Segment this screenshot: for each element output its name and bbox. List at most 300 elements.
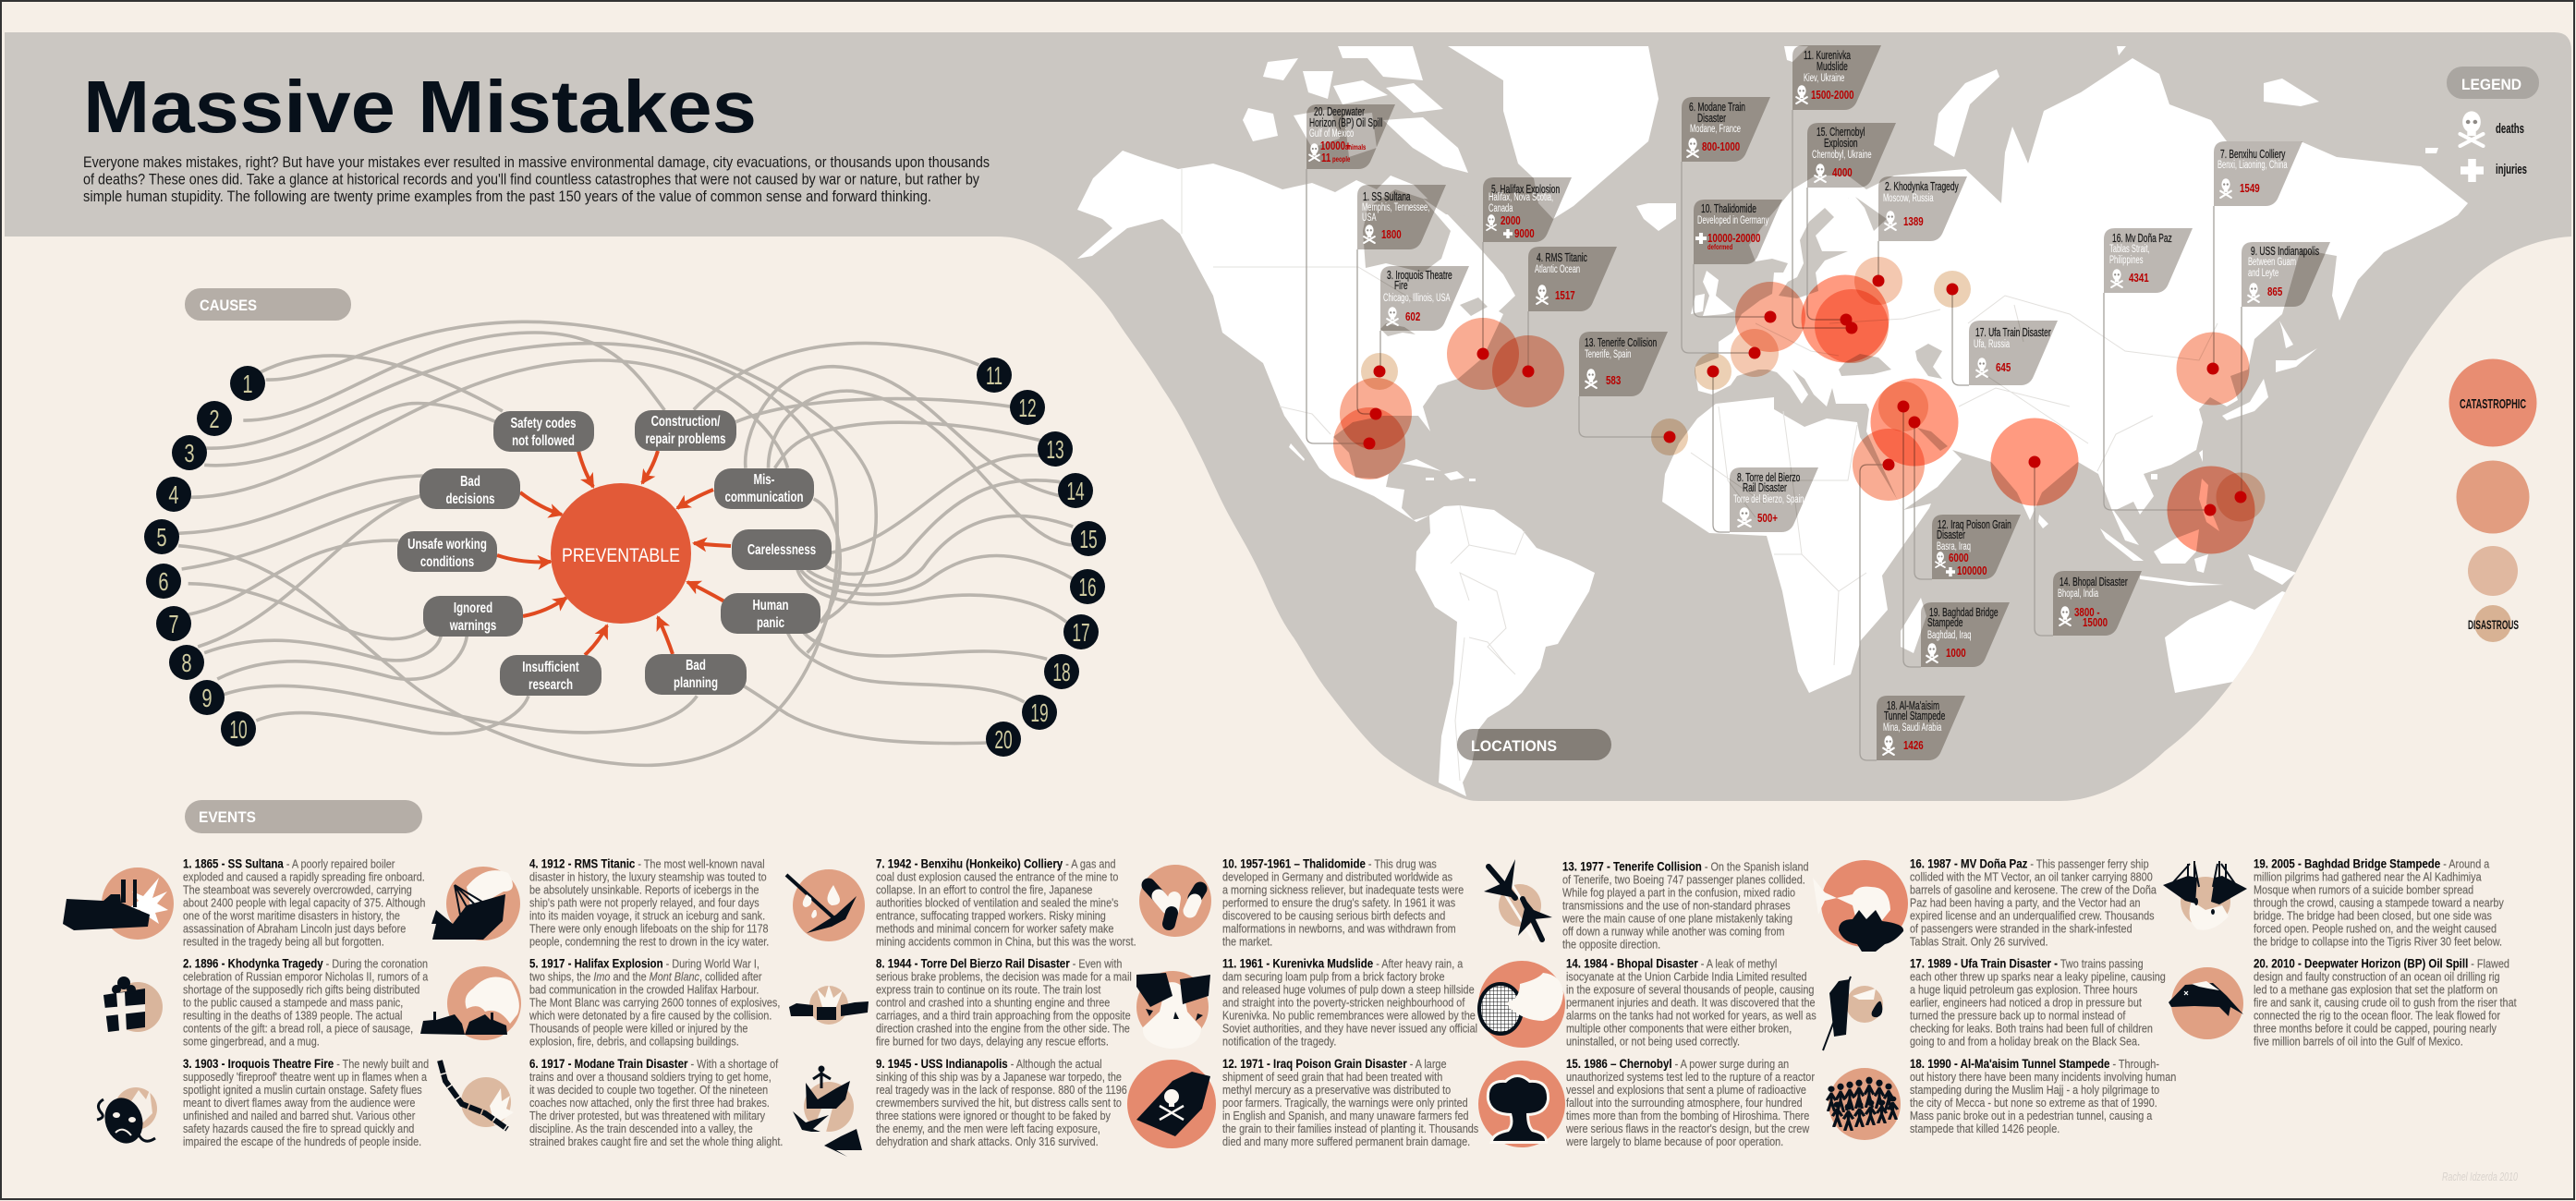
- severity legend: [2448, 358, 2537, 642]
- location label: 4 RMS Titanic: Atlantic Ocean: [1535, 263, 1580, 276]
- location label: 2 Khodynka Tragedy: [1878, 176, 1967, 241]
- intro text block: Everyone makes mistakes, right? But have your mistakes ever resulted in massive environmental damage, city evacuations, or thousands upon thousands: [83, 153, 990, 171]
- numbered event nodes left: 2: [209, 406, 220, 434]
- event 1 text: assassination of Abraham Lincoln just days before: [183, 922, 407, 936]
- location label: 3 Iroquois Theatre Fire: [1380, 266, 1469, 331]
- cause pills: planning: [674, 673, 718, 690]
- event 19 text: [2254, 855, 2504, 949]
- event 6 text: [529, 1056, 783, 1148]
- icon: 14 leaking tank: [1478, 961, 1565, 1048]
- numbered event nodes right: 19: [1030, 698, 1049, 727]
- event 16 text: - This passenger ferry ship: [2030, 857, 2149, 871]
- event 15 text: [1565, 1056, 1815, 1148]
- event 5 text: Thousands of people were killed or injured by the: [529, 1022, 748, 1036]
- event 2 text: 2. 1896 - Khodynka Tragedy: [183, 955, 323, 971]
- numbered event nodes right: 13: [1046, 435, 1064, 464]
- event 4 text: people, condemning the rest to drown in the icy water.: [529, 935, 769, 949]
- location label: 5 Halifax Explosion: [1483, 177, 1572, 242]
- location label: 9 USS Indianapolis: Between Guam: [2248, 256, 2296, 269]
- cause pills: Ignored: [454, 599, 492, 615]
- numbered event nodes right: 18: [1052, 658, 1071, 686]
- legend: injuries: [2461, 159, 2527, 182]
- event 5 text: [529, 955, 780, 1049]
- location label: 18 Al-Ma'aisim: Tunnel Stampede: [1884, 710, 1945, 723]
- event 3 text: safety hazards caused the fire to spread quickly and: [183, 1122, 414, 1135]
- event 1 text: exploded and caused a rapidly spreading fire onboard.: [183, 870, 425, 884]
- icon: 7 pickaxe: [786, 869, 865, 941]
- location label: 7 Benxihu Colliery: 1549: [2240, 183, 2260, 195]
- numbered event nodes left: 4: [168, 481, 179, 510]
- event 6 text: 6. 1917 - Modane Train Disaster: [529, 1056, 688, 1071]
- location label: 16 Mv Dona Paz: 16. Mv Doña Paz: [2112, 232, 2172, 246]
- event 14 text: 14. 1984 - Bhopal Disaster: [1566, 955, 1698, 971]
- event 13 text: transmissions and the use of non-standard phrases: [1562, 899, 1791, 913]
- event 20 text: [2254, 955, 2517, 1049]
- location label: 2 Khodynka Tragedy: Moscow, Russia: [1883, 192, 1934, 205]
- icon: 8 train collision: [789, 985, 869, 1025]
- heading: events: [185, 800, 422, 833]
- event 4 text: - The most well-known naval: [638, 857, 765, 871]
- cause pills: Construction/: [651, 412, 721, 429]
- location label: 8 Torre del Bierzo: Rail Disaster: [1743, 481, 1787, 495]
- location label: 13 Tenerife Collision: 583: [1606, 375, 1621, 387]
- intro text block: of deaths? These ones did. Take a glance at historical records and you'll find countless catastrophes that were not caused by war or nature, but rather by: [83, 170, 979, 188]
- event 15 text: 15. 1986 – Chernobyl: [1566, 1056, 1672, 1071]
- location label: 17 Ufa Train Disaster: 17. Ufa Train Disaster: [1975, 326, 2051, 340]
- severity legend: CATASTROPHIC: [2460, 396, 2526, 412]
- legend heading: [2447, 67, 2539, 99]
- location label: 11 Kurenivka Mudslide: Kiev, Ukraine: [1804, 72, 1845, 85]
- location label: 6 Modane Train Disaster: [1682, 97, 1770, 162]
- cause pills: research: [529, 675, 573, 692]
- event 8 text: [876, 955, 1132, 1049]
- location label: 15 Chernobyl Explosion: 15. Chernobyl: [1817, 126, 1865, 140]
- location label: 9 USS Indianapolis: 9. USS Indianapolis: [2251, 245, 2320, 259]
- event 13 text: While fog played a part in the confusion, mixed radio: [1562, 886, 1795, 900]
- event 9 text: real tragedy was in the lack of response. 880 of the 1196: [876, 1083, 1127, 1097]
- event 3 text: supposedly 'fireproof' theatre went up in flames when a: [183, 1070, 427, 1084]
- icon: 15 mushroom cloud: [1478, 1061, 1565, 1147]
- event 12 text: - A large: [1410, 1057, 1447, 1071]
- event 17 text: 17. 1989 - Ufa Train Disaster -: [1910, 955, 2058, 971]
- location label: 20 Deepwater Horizon: [1306, 104, 1395, 169]
- location label: 15 Chernobyl Explosion: Chernobyl, Ukraine: [1812, 149, 1872, 162]
- event 14 text: multiple other components that were either broken,: [1566, 1022, 1792, 1036]
- event 17 text: going to and from a holiday break on the Black Sea.: [1910, 1035, 2140, 1049]
- numbered event nodes right: 14: [1066, 477, 1085, 505]
- location label: 19 Baghdad Bridge Stampede: [1921, 602, 2010, 667]
- location label: 14 Bhopal Disaster: 15000: [2083, 617, 2108, 629]
- cause pills: Safety codes: [510, 414, 577, 431]
- location label: 12 Iraq Poison Grain: 6000: [1949, 552, 1969, 564]
- event 2 text: to the public caused a stampede and mass panic,: [183, 996, 403, 1010]
- event 14 text: permanent injuries and death. It was discovered that the: [1566, 996, 1816, 1010]
- icon: 10 pills: [1139, 865, 1211, 937]
- event 15 text: were serious flaws in the reactor's design, but the crew: [1565, 1122, 1809, 1135]
- event 17 text: checking for leaks. Both trains had been full of children: [1910, 1022, 2153, 1036]
- event 15 text: were largely to blame because of poor operation.: [1565, 1134, 1783, 1148]
- event 2 text: - During the coronation: [326, 957, 428, 971]
- event 8 text: 8. 1944 - Torre Del Bierzo Rail Disaster: [876, 955, 1070, 971]
- location label: 5 Halifax Explosion: 2000: [1501, 215, 1521, 227]
- event 20 text: connected the rig to the ocean floor. The leak flowed for: [2254, 1009, 2500, 1023]
- event 4 text: [529, 855, 769, 949]
- location label: 20 Deepwater Horizon: Gulf of Mexico: [1309, 127, 1355, 140]
- event 17 text: [1910, 955, 2166, 1049]
- severity circles on map: [1333, 257, 2266, 554]
- location label: 20 Deepwater Horizon: people: [1332, 156, 1350, 164]
- event 10 text: developed in Germany and distributed worldwide as: [1222, 870, 1452, 884]
- event 19 text: Mosque when rumors of a suicide bomber spread: [2254, 883, 2473, 897]
- event 18 text: Mass panic broke out in a pedestrian tunnel, causing a: [1910, 1109, 2153, 1122]
- event 20 text: led to a methane gas explosion that set the platform on: [2254, 983, 2497, 997]
- event 12 text: [1222, 1056, 1478, 1148]
- event 9 text: crewmembers survived the hit, but distress calls sent to: [876, 1096, 1122, 1110]
- cause pills: repair problems: [645, 430, 726, 446]
- location label: 18 Al-Ma'aisim: 1426: [1903, 740, 1924, 752]
- event 16 text: expired license and an underqualified crew. Thousands: [1910, 909, 2155, 923]
- event 17 text: each other threw up sparks near a leaky pipeline, causing: [1910, 970, 2166, 984]
- event 12 text: died and many more suffered permanent brain damage.: [1222, 1134, 1470, 1148]
- event 9 text: [876, 1056, 1127, 1148]
- cause pills: Carelessness: [747, 540, 816, 557]
- event 5 text: 5. 1917 - Halifax Explosion: [529, 955, 663, 971]
- event 13 text: off down a runway while another was coming from: [1562, 925, 1784, 939]
- event 8 text: carriages, and a third train approaching from the opposite: [876, 1009, 1131, 1023]
- icon: 9 sinking ship with sharks: [793, 1066, 862, 1157]
- cause pills: not followed: [512, 431, 575, 448]
- icon: 3 theatre mask: [97, 1087, 157, 1148]
- event 1 text: - A poorly repaired boiler: [286, 857, 395, 871]
- event 4 text: be absolutely unsinkable. Reports of icebergs in the: [529, 883, 759, 897]
- location label: 17 Ufa Train Disaster: Ufa, Russia: [1974, 338, 2010, 351]
- cause pills: [397, 410, 832, 696]
- event 20 text: 20. 2010 - Deepwater Horizon (BP) Oil Spill: [2254, 955, 2468, 971]
- event 19 text: forced open. People rushed on, and the weight caused: [2254, 922, 2497, 936]
- event 9 text: sinking of this ship was by a Japanese war torpedo, the: [876, 1070, 1122, 1084]
- event 18 text: the city of Mecca - but none so extreme as that of 1990.: [1910, 1096, 2157, 1110]
- location label: 1 SS Sultana: USA: [1362, 212, 1377, 224]
- location label: 6 Modane Train Disaster: 800-1000: [1702, 141, 1740, 153]
- event 10 text: malformations in newborns, and was withdrawn from: [1222, 922, 1456, 936]
- event 17 text: Two trains passing: [2060, 957, 2144, 971]
- location label: 19 Baghdad Bridge Stampede: 1000: [1946, 648, 1966, 660]
- location label: 1 SS Sultana: 1800: [1381, 229, 1402, 241]
- location label: 16 Mv Dona Paz: 4341: [2129, 273, 2149, 285]
- event 11 text: notification of the tragedy.: [1222, 1035, 1336, 1049]
- numbered event nodes left: 8: [181, 649, 192, 678]
- icon: 13 colliding planes: [1484, 859, 1552, 940]
- location label: 10 Thalidomide: Developed in Germany: [1697, 214, 1768, 227]
- event 16 text: barrels of gasoline and kerosene. The crew of the Doña: [1910, 883, 2157, 897]
- numbered event nodes left: 10: [229, 715, 248, 744]
- location label: 11 Kurenivka Mudslide: 1500-2000: [1811, 90, 1854, 102]
- intro text block: simple human stupidity. The following are twenty prime examples from the past 150 years of the value of common sense and forward thinking.: [83, 188, 931, 205]
- location label: 13 Tenerife Collision: [1579, 332, 1668, 396]
- event 13 text: - On the Spanish island: [1705, 860, 1809, 874]
- event 2 text: some gingerbread, and a mug.: [183, 1035, 320, 1049]
- heading: causes: [185, 288, 351, 321]
- location label: 7 Benxihu Colliery: Benxi, Liaoning, China: [2218, 159, 2288, 172]
- location label: 5 Halifax Explosion: 5. Halifax Explosion: [1491, 183, 1560, 197]
- location dots: [1364, 275, 2247, 516]
- event 1 text: about 2400 people with legal capacity of 375. Although: [183, 896, 425, 910]
- numbered event nodes left: 1: [242, 370, 253, 399]
- location label: 5 Halifax Explosion: Canada: [1488, 202, 1513, 215]
- event 15 text: fallout into the surrounding atmosphere, four hundred: [1566, 1096, 1803, 1110]
- event 18 text: - Through-: [2112, 1057, 2159, 1071]
- location label: 16 Mv Dona Paz: [2104, 228, 2193, 293]
- location label: 5 Halifax Explosion: Halifax, Nova Scotia,: [1488, 191, 1553, 204]
- event 11 text: 11. 1961 - Kurenivka Mudslide: [1222, 955, 1373, 971]
- location label: 10 Thalidomide: [1694, 200, 1782, 264]
- event 7 text: - A gas and: [1065, 857, 1116, 871]
- cause pills: conditions: [420, 552, 474, 569]
- event 9 text: dehydration and shark attacks. Only 316 survived.: [876, 1134, 1099, 1148]
- location label: 7 Benxihu Colliery: [2214, 141, 2303, 206]
- location label: 6 Modane Train Disaster: Modane, France: [1690, 123, 1741, 136]
- location label: 13 Tenerife Collision: Tenerife, Spain: [1585, 348, 1631, 361]
- location label: 9 USS Indianapolis: [2242, 242, 2330, 307]
- event 8 text: - Even with: [1073, 957, 1122, 971]
- event 7 text: coal dust explosion caused the entrance of the mine to: [876, 870, 1119, 884]
- location label: 17 Ufa Train Disaster: [1969, 321, 2058, 385]
- event 14 text: uninstalled, or not being used correctly.: [1566, 1035, 1740, 1049]
- russian arctic islands: [1934, 69, 1999, 157]
- event 1 text: [183, 855, 425, 949]
- event 7 text: authorities blocked of ventilation and sealed the mine's: [876, 896, 1119, 910]
- event 19 text: through the crowd, causing a stampede toward a nearby: [2254, 896, 2504, 910]
- icon: 19 collapsing bridge: [2163, 861, 2247, 930]
- event 8 text: control and crashed into a shunting engine and three: [876, 996, 1111, 1010]
- event 10 text: - This drug was: [1368, 857, 1437, 871]
- numbered event nodes left: [144, 366, 265, 746]
- event 1 text: one of the worst maritime disasters in history, the: [183, 909, 400, 923]
- event 19 text: million pilgrims had gathered near the Al Kadhimiya: [2254, 870, 2482, 884]
- cause pills: Unsafe working: [407, 535, 487, 552]
- location label: 8 Torre del Bierzo: Torre del Bierzo, Spain: [1733, 493, 1804, 506]
- cause pills: Bad: [460, 472, 480, 489]
- south america: [1416, 505, 1595, 796]
- icon: 11 mudslide: [1136, 971, 1210, 1049]
- event 9 text: 9. 1945 - USS Indianapolis: [876, 1056, 1008, 1071]
- location label: 12 Iraq Poison Grain: 100000: [1957, 565, 1987, 577]
- event 13 text: the opposite direction.: [1562, 938, 1660, 952]
- event 15 text: - A power surge during an: [1675, 1057, 1789, 1071]
- event 11 text: dam securing loam pulp from a brick factory broke: [1222, 970, 1445, 984]
- icon: 4 titanic: [431, 867, 520, 940]
- event 7 text: entrance, suffocating trapped workers. Risky mining: [876, 909, 1106, 923]
- eurasia: [1695, 58, 2468, 545]
- severity legend: DISASTROUS: [2468, 617, 2519, 632]
- event 12 text: the grain to their families instead of planting it. Thousands: [1222, 1122, 1478, 1135]
- greenland: [1448, 46, 1659, 219]
- location label: 9 USS Indianapolis: and Leyte: [2248, 267, 2278, 280]
- event 1 text: resulted in the tragedy being all but forgotten.: [183, 935, 384, 949]
- madagascar: [1901, 598, 1926, 653]
- event 5 text: explosion, fire, debris, and collapsing buildings.: [529, 1035, 739, 1049]
- event 16 text: [1910, 855, 2157, 949]
- event 3 text: - The newly built and: [336, 1057, 429, 1071]
- event 2 text: shortage of the supposedly rich gifts being distributed: [183, 983, 419, 997]
- event 5 text: The Mont Blanc was carrying 2600 tonnes of explosives,: [529, 996, 780, 1010]
- location label: 5 Halifax Explosion: 9000: [1514, 228, 1535, 240]
- country borders: [1182, 169, 2218, 781]
- event 18 text: [1910, 1056, 2176, 1135]
- event 6 text: it was decided to couple two together. Of the nineteen: [529, 1083, 768, 1097]
- event 7 text: collapse. In an effort to control the fire, Japanese: [876, 883, 1093, 897]
- event 12 text: poor farmers. Tragically, the warnings were only printed: [1222, 1096, 1468, 1110]
- event 12 text: methyl mercury as a preservative was distributed to: [1222, 1083, 1452, 1097]
- event 9 text: three stations were ignored or thought to be faked by: [876, 1109, 1111, 1122]
- event 2 text: [183, 955, 429, 1049]
- event 2 text: celebration of Russian emporor Nicholas II, rumors of a: [183, 970, 429, 984]
- location label: 19 Baghdad Bridge Stampede: 19. Baghdad Bridge: [1929, 606, 1999, 620]
- icon: 18 crowd: [1827, 1068, 1901, 1140]
- location label: 8 Torre del Bierzo: 8. Torre del Bierzo: [1737, 471, 1800, 485]
- event 18 text: 18. 1990 - Al-Ma'aisim Tunnel Stampede: [1910, 1056, 2109, 1071]
- numbered event nodes left: 7: [168, 611, 179, 639]
- event 16 text: of passengers were stranded in the shark-infested: [1910, 922, 2132, 936]
- event 20 text: - Flawed: [2471, 957, 2509, 971]
- location label: 20 Deepwater Horizon: 20. Deepwater: [1314, 105, 1365, 119]
- event 16 text: 16. 1987 - MV Doña Paz: [1910, 855, 2027, 871]
- event 16 text: collided with the MT Vector, an oil tanker carrying 8800: [1910, 870, 2153, 884]
- cause pills: panic: [757, 613, 784, 630]
- location label: 16 Mv Dona Paz: Philippines: [2109, 254, 2144, 267]
- event 15 text: vessel and explosions that sent a plume of radioactive: [1566, 1083, 1806, 1097]
- event 11 text: [1222, 955, 1477, 1049]
- event 11 text: Kurenivka. No public remembrances were allowed by the: [1222, 1009, 1476, 1023]
- location label: 10 Thalidomide: 10000-20000: [1707, 233, 1760, 245]
- event 7 text: [876, 855, 1136, 949]
- event 15 text: times more than from the bombing of Hiroshima. There: [1566, 1109, 1810, 1122]
- event 13 text: 13. 1977 - Tenerife Collision: [1562, 858, 1702, 874]
- arrows to preventable: [497, 451, 731, 655]
- location label: 14 Bhopal Disaster: Bhopal, India: [2058, 588, 2098, 600]
- location label: 8 Torre del Bierzo: 500+: [1757, 513, 1778, 525]
- event 3 text: meant to divert flames away from the audience were: [183, 1096, 416, 1110]
- event 13 text: were the main cause of one plane mistakenly taking: [1561, 912, 1792, 926]
- location label: 16 Mv Dona Paz: Tablas Strait,: [2109, 243, 2150, 256]
- legend: deaths: deaths: [2496, 121, 2524, 137]
- location label: 8 Torre del Bierzo: [1730, 467, 1818, 532]
- icon: 6 train derail: [440, 1061, 514, 1129]
- location label: 3 Iroquois Theatre Fire: 3. Iroquois Theatre: [1387, 269, 1452, 283]
- event 14 text: isocyanate at the Union Carbide India Limited resulted: [1566, 970, 1807, 984]
- location label: 14 Bhopal Disaster: [2053, 571, 2142, 636]
- location label: 6 Modane Train Disaster: Disaster: [1697, 112, 1726, 126]
- event 12 text: in English and Spanish, and many unaware farmers fed: [1222, 1109, 1469, 1122]
- event 20 text: fire and sank it, causing crude oil to gush from the riser that: [2254, 996, 2517, 1010]
- event 4 text: There were only enough lifeboats on the ship for 1178: [529, 922, 769, 936]
- location label: 13 Tenerife Collision: 13. Tenerife Collision: [1585, 336, 1657, 350]
- event 14 text: [1566, 955, 1817, 1049]
- event 11 text: and released huge volumes of pulp down a steep hillside: [1222, 983, 1475, 997]
- centre circle: preventable: PREVENTABLE: [562, 545, 680, 566]
- numbered event nodes right: 16: [1078, 573, 1097, 601]
- seas over land: [1363, 189, 1948, 451]
- event 20 text: three months before it could be capped, pouring nearly: [2254, 1022, 2497, 1036]
- location label: 6 Modane Train Disaster: 6. Modane Train: [1689, 101, 1745, 115]
- event 7 text: 7. 1942 - Benxihu (Honkeiko) Colliery: [876, 855, 1063, 871]
- event 8 text: fire burned for two days, delaying any rescue efforts.: [876, 1035, 1109, 1049]
- location label: 15 Chernobyl Explosion: 4000: [1832, 167, 1853, 179]
- numbered event nodes right: 20: [994, 725, 1013, 754]
- event 19 text: 19. 2005 - Baghdad Bridge Stampede: [2254, 855, 2440, 871]
- location label: 20 Deepwater Horizon: 10000+: [1320, 140, 1351, 152]
- event 10 text: a morning sickness reliever, but inadequate tests were: [1222, 883, 1464, 897]
- location label: 1 SS Sultana: [1357, 185, 1446, 249]
- location label: 15 Chernobyl Explosion: [1807, 123, 1896, 188]
- cause pills: Insufficient: [522, 658, 579, 674]
- event 11 text: and straight into the poverty-stricken neighbourhood of: [1222, 996, 1465, 1010]
- event 3 text: impaired the escape of the hundreds of people inside.: [183, 1134, 421, 1148]
- title: Massive Mistakes: [83, 66, 757, 148]
- event 7 text: mining accidents common in China, but this was the worst.: [876, 935, 1136, 949]
- heading: events: EVENTS: [199, 808, 256, 826]
- location label: 20 Deepwater Horizon: animals: [1345, 144, 1366, 152]
- location label: 15 Chernobyl Explosion: Explosion: [1824, 137, 1858, 151]
- event 10 text: performed to ensure the drug's safety. In 1961 it was: [1222, 896, 1455, 910]
- numbered event nodes right: 11: [986, 361, 1002, 390]
- numbered event nodes left: 5: [156, 524, 167, 552]
- east asia islands: [2279, 321, 2293, 348]
- location label: 19 Baghdad Bridge Stampede: Stampede: [1927, 616, 1962, 630]
- location label: 4 RMS Titanic: [1528, 247, 1617, 311]
- location label: 14 Bhopal Disaster: 3800 -: [2074, 607, 2100, 619]
- intro text block: [83, 153, 990, 205]
- numbered event nodes right: 17: [1072, 618, 1090, 647]
- event 8 text: serious brake problems, the decision was made for a mail: [876, 970, 1132, 984]
- event 14 text: in the exposure of several thousands of people, causing: [1566, 983, 1814, 997]
- event 2 text: resulting in the deaths of 1389 people. The actual: [183, 1009, 402, 1023]
- cause pills: warnings: [449, 616, 496, 633]
- cause pills: Bad: [686, 656, 706, 673]
- location label: 12 Iraq Poison Grain: 12. Iraq Poison Grain: [1938, 518, 2011, 532]
- location label: 12 Iraq Poison Grain: [1932, 515, 2021, 579]
- location label: 3 Iroquois Theatre Fire: 602: [1405, 311, 1420, 323]
- event 14 text: - A leak of methyl: [1701, 957, 1777, 971]
- event 1 text: 1. 1865 - SS Sultana: [183, 855, 285, 871]
- icon: 16 wine glass and oil: [1813, 860, 1908, 952]
- location label: 2 Khodynka Tragedy: 2. Khodynka Tragedy: [1885, 180, 1959, 194]
- event 13 text: of Tenerife, two Boeing 747 passenger planes collided.: [1562, 873, 1805, 887]
- event 18 text: stampeding during the Muslim Hajj - a holy pilgrimage to: [1910, 1083, 2159, 1097]
- event 10 text: 10. 1957-1961 – Thalidomide: [1222, 855, 1366, 871]
- credit: Rachel Idzerda 2010: [2442, 1171, 2518, 1183]
- event 17 text: a huge liquid petroleum gas explosion. Three hours: [1910, 983, 2137, 997]
- location label: 1 SS Sultana: Memphis, Tennessee,: [1362, 201, 1429, 214]
- australia: [2165, 591, 2286, 693]
- event 4 text: 4. 1912 - RMS Titanic: [529, 855, 635, 871]
- legend heading: LEGEND: [2461, 76, 2521, 93]
- location label: 20 Deepwater Horizon: 11: [1321, 152, 1331, 164]
- event 8 text: direction crashed into the engine from the other side. The: [876, 1022, 1130, 1036]
- location label: 11 Kurenivka Mudslide: 11. Kurenivka: [1804, 49, 1852, 63]
- event 13 text: [1561, 858, 1809, 952]
- event 11 text: Soviet authorities, and they have never issued any official: [1222, 1022, 1477, 1036]
- cause pills: Mis-: [753, 470, 775, 487]
- event 1 text: The steamboat was severely overcrowded, carrying: [183, 883, 412, 897]
- event 12 text: shipment of seed grain that had been treated with: [1222, 1070, 1442, 1084]
- causes network lines: [178, 321, 1073, 765]
- location label: 14 Bhopal Disaster: 14. Bhopal Disaster: [2060, 576, 2128, 589]
- event 12 text: 12. 1971 - Iraq Poison Grain Disaster: [1222, 1056, 1407, 1071]
- event 4 text: ship's path were not properly relayed, and four days: [529, 896, 759, 910]
- event 3 text: 3. 1903 - Iroquois Theatre Fire: [183, 1056, 334, 1071]
- location label: 18 Al-Ma'aisim: 18. Al-Ma'aisim: [1887, 699, 1939, 713]
